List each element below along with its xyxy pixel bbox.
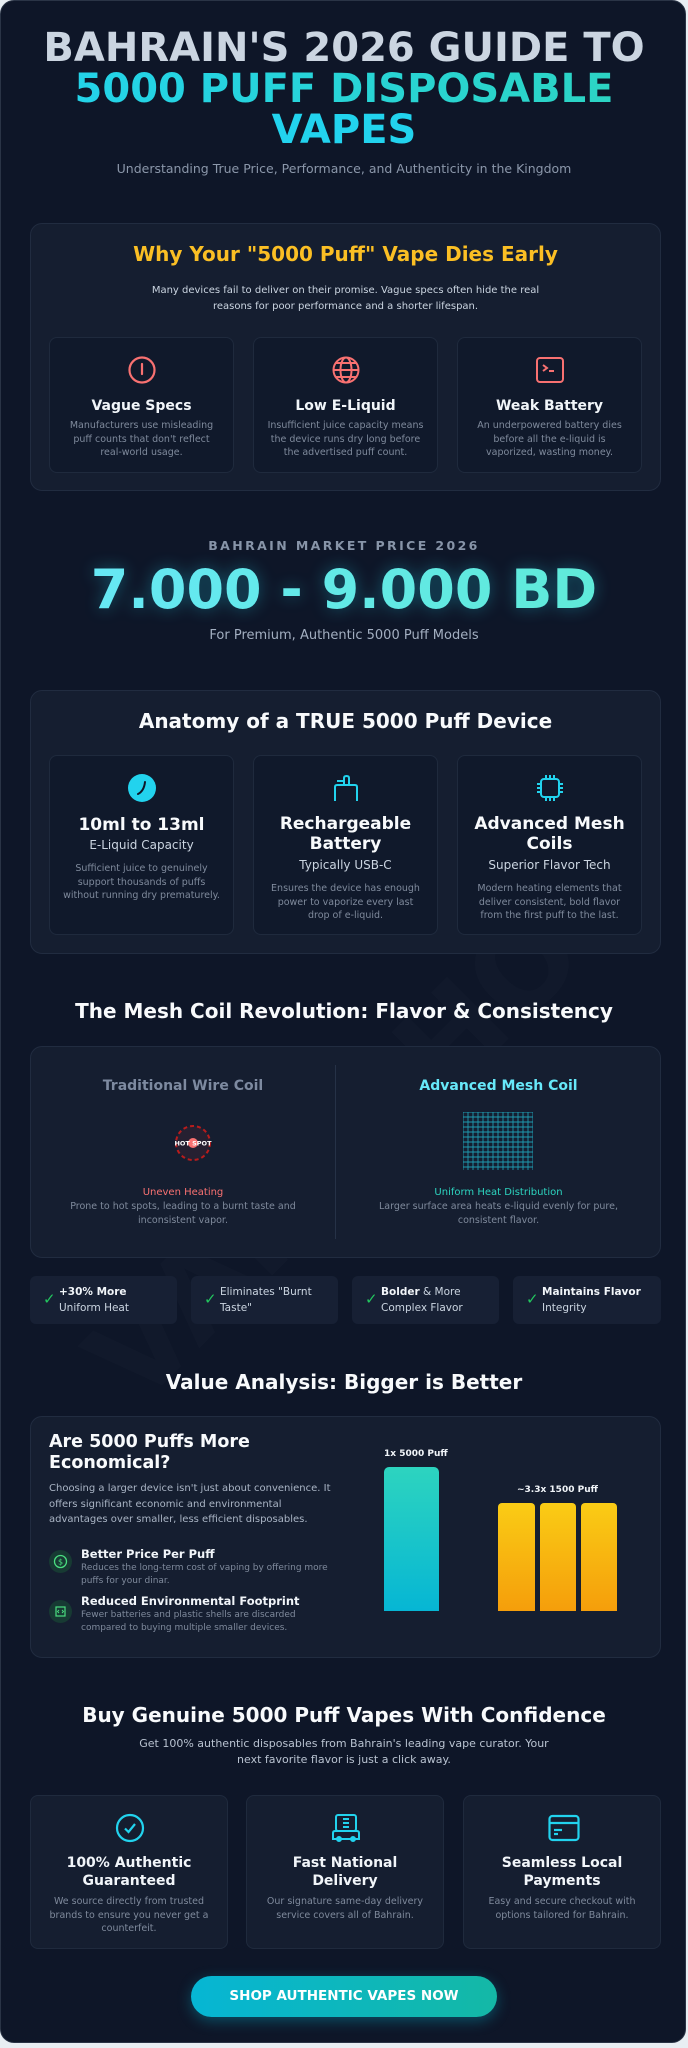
- card: e-liquid capacity: 10ml to 13ml: [78, 815, 205, 835]
- title: 5000 PUFF DISPOSABLE: [75, 66, 613, 112]
- icon: mesh grid: [463, 1112, 533, 1170]
- intro text: [152, 285, 539, 312]
- bar chart: 1x 5000 Puff: [384, 1449, 448, 1459]
- intro text: next favorite flavor is just a click away.: [237, 1753, 451, 1766]
- intro text: Get 100% authentic disposables from Bahrain's leading vape curator. Your: [139, 1737, 549, 1750]
- traditional coil: Traditional Wire Coil: [103, 1078, 263, 1094]
- icon: chip: [537, 775, 563, 801]
- card: authentic: We source directly from trusted brands to ensure you never get a counterfeit.: [50, 1896, 208, 1934]
- card: authentic: Guaranteed: [83, 1873, 175, 1889]
- chip: uniform heat: ✓: [43, 1290, 56, 1308]
- subtitle: Understanding True Price, Performance, and Authenticity in the Kingdom: [117, 161, 571, 176]
- title: VAPES: [272, 107, 416, 153]
- price label: BAHRAIN MARKET PRICE 2026: [208, 538, 480, 553]
- mesh coil: Larger surface area heats e-liquid evenly for pure,: [379, 1201, 618, 1212]
- card: mesh coils: Modern heating elements that deliver consistent, bold flavor from the first puff to the last.: [477, 883, 622, 921]
- intro text: Many devices fail to deliver on their promise. Vague specs often hide the real: [152, 285, 539, 296]
- intro text: [139, 1737, 549, 1766]
- mesh coil: Advanced Mesh Coil: [419, 1078, 578, 1094]
- card: rechargeable battery: Typically USB-C: [299, 858, 392, 872]
- chip: flavor integrity: [513, 1276, 661, 1324]
- chip: bolder flavor: ✓: [365, 1290, 378, 1308]
- chip: uniform heat: +30% More: [59, 1286, 127, 1298]
- price value: 7.000 - 9.000 BD: [91, 558, 597, 621]
- card: delivery: Fast National: [293, 1855, 397, 1871]
- card: authentic: 100% Authentic: [67, 1855, 191, 1871]
- card: e-liquid capacity: Sufficient juice to genuinely support thousands of puffs without running dry prematurely.: [63, 863, 220, 901]
- button: shop now: [191, 1976, 497, 2017]
- card: rechargeable battery: Rechargeable: [280, 814, 411, 834]
- benefit: price per puff: $: [58, 1558, 63, 1566]
- icon: terminal: [536, 357, 564, 383]
- card: mesh coils: Advanced Mesh: [474, 814, 625, 834]
- card: e-liquid capacity: E-Liquid Capacity: [89, 838, 194, 852]
- mesh coil: consistent flavor.: [458, 1214, 539, 1226]
- chip: burnt taste: [191, 1276, 338, 1324]
- card: delivery: Delivery: [312, 1873, 378, 1889]
- icon: check circle: [116, 1814, 144, 1842]
- card: vague specs: [49, 337, 234, 473]
- card: low e-liquid: Low E-Liquid: [295, 398, 396, 414]
- card: delivery: [246, 1795, 444, 1949]
- card: rechargeable battery: [253, 755, 438, 935]
- card: vague specs: Vague Specs: [91, 398, 192, 414]
- card: weak battery: Weak Battery: [496, 398, 603, 414]
- card: low e-liquid: Insufficient juice capacity means the device runs dry long before the advertised puff count.: [268, 420, 423, 458]
- heading: Anatomy of a TRUE 5000 Puff Device: [139, 709, 552, 733]
- benefit: price per puff: [49, 1547, 328, 1586]
- benefit: environmental footprint: Fewer batteries and plastic shells are discarded compared to buying multiple smaller devices.: [81, 1610, 296, 1633]
- chip: uniform heat: Uniform Heat: [59, 1302, 129, 1314]
- watermark: VAPESHOP: [61, 819, 671, 1429]
- chip: bolder flavor: Bolder & More: [381, 1286, 461, 1298]
- benefit: price per puff: Better Price Per Puff: [81, 1547, 215, 1561]
- icon: battery plug: [334, 775, 358, 801]
- chip: bolder flavor: [352, 1276, 499, 1324]
- mesh coil: [379, 1078, 618, 1226]
- icon: hot spot: HOT SPOT: [174, 1140, 212, 1148]
- card: mesh coils: Superior Flavor Tech: [488, 858, 611, 872]
- chip: flavor integrity: Maintains Flavor: [542, 1286, 641, 1298]
- traditional coil: Prone to hot spots, leading to a burnt taste and: [70, 1201, 296, 1212]
- heading: mesh coil revolution: The Mesh Coil Revolution: Flavor & Consistency: [75, 999, 613, 1023]
- card: payments: Seamless Local: [502, 1855, 622, 1871]
- card: rechargeable battery: Ensures the device has enough power to vaporize every last drop of e-liquid.: [271, 883, 420, 921]
- price note: For Premium, Authentic 5000 Puff Models: [209, 628, 479, 643]
- benefit: environmental footprint: Reduced Environmental Footprint: [81, 1594, 300, 1608]
- text block: Economical?: [49, 1453, 170, 1473]
- card: vague specs: Manufacturers use misleading puff counts that don't reflect real-world usage.: [70, 420, 213, 458]
- card: authentic: [30, 1795, 228, 1949]
- text block: Choosing a larger device isn't just about convenience. It offers significant economic and environmental advantages over smaller, less efficient disposables.: [49, 1483, 331, 1525]
- title: BAHRAIN'S 2026 GUIDE TO: [43, 25, 645, 71]
- benefit: price per puff: Reduces the long-term cost of vaping by offering more puffs for your dinar.: [81, 1563, 328, 1586]
- mesh coil: Uniform Heat Distribution: [434, 1187, 563, 1198]
- card: weak battery: [457, 337, 642, 473]
- card: payments: Easy and secure checkout with options tailored for Bahrain.: [488, 1896, 636, 1920]
- text block: [49, 1432, 331, 1525]
- icon: credit card: [548, 1814, 580, 1842]
- chip: burnt taste: Taste": [220, 1302, 252, 1314]
- chip: bolder flavor: Complex Flavor: [381, 1302, 463, 1314]
- traditional coil: inconsistent vapor.: [138, 1214, 228, 1226]
- icon: globe: [332, 356, 360, 384]
- title: [43, 25, 645, 153]
- intro text: reasons for poor performance and a shorter lifespan.: [213, 301, 478, 312]
- heading: Why Your "5000 Puff" Vape Dies Early: [133, 242, 558, 266]
- chip: uniform heat: [30, 1276, 177, 1324]
- icon: truck: [332, 1814, 360, 1842]
- card: rechargeable battery: Battery: [310, 834, 381, 854]
- benefit: environmental footprint: [49, 1594, 300, 1633]
- card: mesh coils: Coils: [527, 834, 572, 854]
- traditional coil: [70, 1078, 296, 1226]
- card: weak battery: An underpowered battery dies before all the e-liquid is vaporized, wasting money.: [477, 420, 622, 458]
- card: mesh coils: [457, 755, 642, 935]
- heading: buy genuine: Buy Genuine 5000 Puff Vapes With Confidence: [82, 1703, 606, 1727]
- panel: coil comparison: [30, 1046, 661, 1258]
- icon: drop: [128, 774, 156, 802]
- traditional coil: Uneven Heating: [143, 1187, 223, 1198]
- icon: hot spot: [174, 1125, 212, 1161]
- card: payments: Payments: [523, 1873, 601, 1889]
- heading: value analysis: Value Analysis: Bigger is Better: [166, 1370, 522, 1394]
- chip: burnt taste: Eliminates "Burnt: [220, 1286, 312, 1298]
- icon: alert circle: [128, 356, 156, 384]
- bar chart: [384, 1449, 617, 1611]
- card: payments: [463, 1795, 661, 1949]
- text block: Are 5000 Puffs More: [49, 1432, 250, 1452]
- card: low e-liquid: [253, 337, 438, 473]
- card: delivery: Our signature same-day delivery service covers all of Bahrain.: [267, 1896, 423, 1920]
- chip: flavor integrity: ✓: [526, 1290, 539, 1308]
- chip: flavor integrity: Integrity: [542, 1302, 587, 1314]
- panel: why vape dies early: [30, 223, 661, 491]
- panel: anatomy: [30, 690, 661, 954]
- chip: burnt taste: ✓: [204, 1290, 217, 1308]
- button: shop now: SHOP AUTHENTIC VAPES NOW: [229, 1988, 459, 2004]
- card: e-liquid capacity: [49, 755, 234, 935]
- bar chart: ~3.3x 1500 Puff: [517, 1485, 598, 1495]
- panel: value analysis: [30, 1416, 661, 1658]
